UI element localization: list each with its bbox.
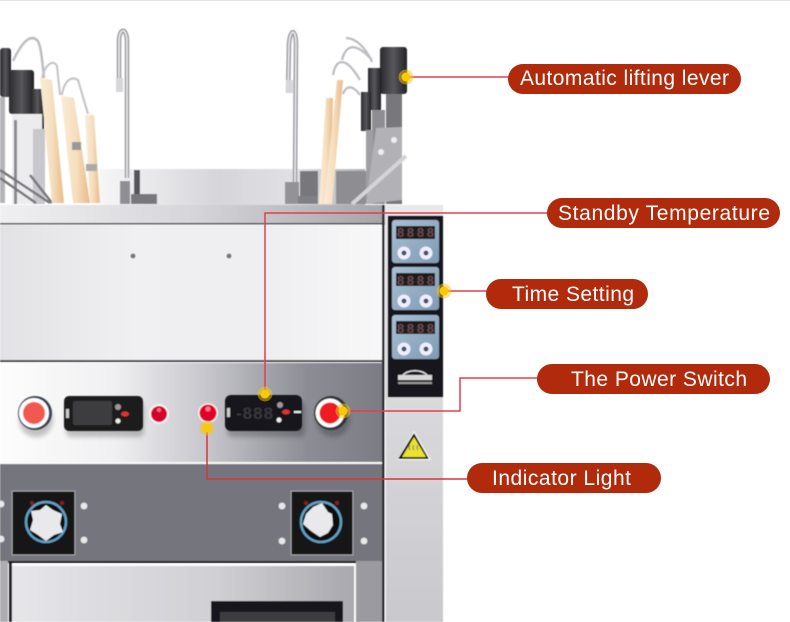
timer module 3 [392, 315, 439, 359]
connector: power switch [336, 378, 539, 418]
timer module 1 [392, 220, 439, 263]
timer control strip [388, 216, 443, 397]
lower dark band [0, 464, 384, 561]
timer module 2 [392, 267, 439, 310]
label: power switch [537, 364, 770, 394]
side column [385, 205, 443, 622]
label: time setting [486, 279, 648, 309]
button shadows [19, 402, 350, 437]
right knob [278, 491, 368, 555]
lower door [12, 564, 354, 622]
label: power switch: The Power Switch [571, 368, 747, 391]
thermostat right: -888 [236, 404, 274, 423]
left baskets and levers [0, 38, 100, 204]
indicator lamp left [149, 404, 169, 424]
left knob [0, 491, 88, 555]
indicator lamp right [198, 403, 218, 423]
upper panel [0, 225, 384, 360]
left faucet [116, 31, 157, 204]
timer module 1: 8888 [397, 225, 434, 240]
label: standby temperature [547, 198, 780, 228]
label: automatic lifting lever [508, 64, 741, 94]
strip logo [398, 371, 432, 384]
label: automatic lifting lever: Automatic lifting lever [520, 67, 729, 90]
right faucet [285, 32, 318, 204]
label: standby temperature: Standby Temperature [558, 202, 770, 225]
timer module 2: 8888 [397, 273, 434, 288]
cooker machine [0, 31, 443, 622]
icon: heat warning triangle [397, 431, 431, 460]
right baskets and levers [319, 38, 407, 204]
connector: indicator light [200, 420, 469, 479]
label: indicator light: Indicator Light [492, 467, 631, 490]
label: time setting: Time Setting [512, 283, 634, 306]
power button right [314, 396, 348, 430]
connector: automatic lifting lever [398, 70, 510, 84]
door handle [211, 601, 343, 622]
power button left [18, 396, 52, 430]
connector: time setting [436, 284, 488, 298]
label: indicator light [467, 463, 661, 493]
timer module 3: 8888 [397, 321, 434, 336]
thermostat right [225, 395, 302, 431]
connector: standby temperature [258, 213, 549, 402]
thermostat left [64, 396, 143, 431]
top rim [0, 205, 386, 224]
control panel [0, 363, 382, 463]
back splash [100, 169, 365, 205]
